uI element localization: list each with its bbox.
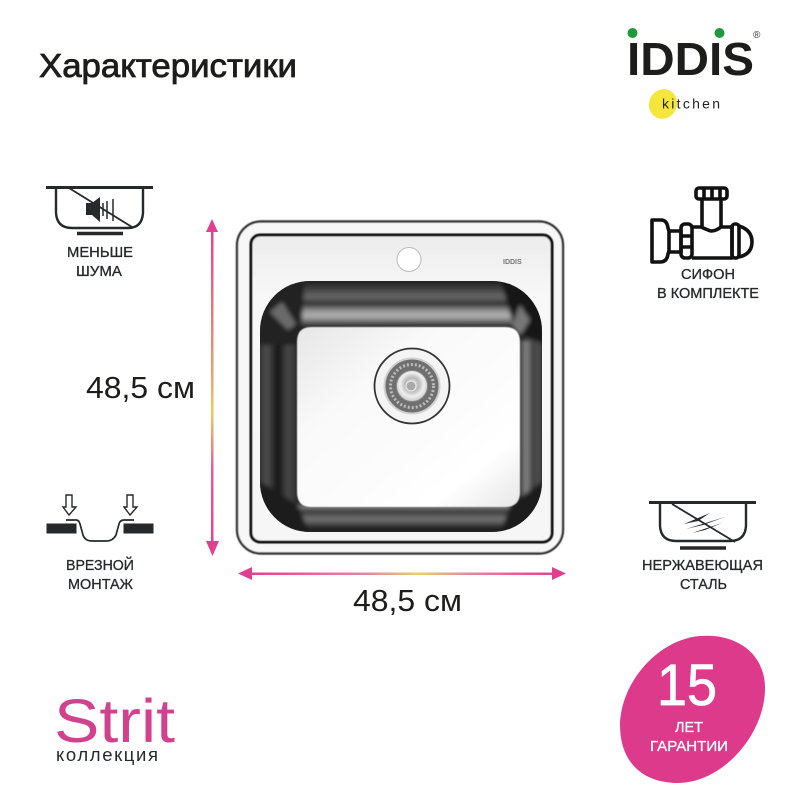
tap hole bbox=[397, 248, 421, 272]
width arrow bbox=[238, 567, 566, 580]
logo green dots bbox=[628, 28, 724, 38]
label: flush mount: ВРЕЗНОЙ bbox=[66, 556, 134, 574]
label: less noise bbox=[67, 245, 133, 280]
icon: less noise sink bbox=[46, 188, 153, 234]
label: siphon included bbox=[657, 267, 759, 302]
warranty badge bbox=[620, 636, 765, 783]
label: siphon included: СИФОН bbox=[681, 267, 735, 283]
icon: flush mount bbox=[47, 495, 153, 541]
drain bbox=[374, 348, 450, 424]
logo yellow blob bbox=[644, 84, 682, 124]
label: stainless steel: НЕРЖАВЕЮЩАЯ bbox=[642, 558, 763, 574]
logo registered mark: ® bbox=[753, 30, 761, 41]
logo wordmark: IDDIS bbox=[627, 33, 754, 85]
label: flush mount: МОНТАЖ bbox=[68, 577, 134, 593]
logo kitchen text: kitchen bbox=[662, 96, 720, 112]
icon: siphon bbox=[652, 188, 752, 262]
label: stainless steel: СТАЛЬ bbox=[680, 577, 727, 593]
brand mark on sink: IDDIS bbox=[503, 259, 522, 266]
logo: IDDIS kitchen bbox=[627, 28, 761, 124]
label: stainless steel bbox=[642, 558, 763, 593]
collection name: Strit bbox=[54, 687, 175, 755]
bowl bbox=[258, 279, 544, 534]
sink top plate bbox=[251, 235, 552, 542]
sink outer rim bbox=[237, 222, 563, 554]
sink image bbox=[237, 222, 563, 554]
warranty label: ГАРАНТИИ bbox=[650, 739, 728, 755]
icon: stainless steel sink bbox=[649, 502, 756, 548]
badge blob bbox=[620, 636, 765, 783]
collection label: коллекция bbox=[56, 744, 158, 765]
label: less noise: МЕНЬШЕ bbox=[67, 245, 133, 261]
label: siphon included: В КОМПЛЕКТЕ bbox=[657, 286, 759, 302]
warranty label bbox=[650, 720, 728, 755]
bowl floor bbox=[297, 327, 520, 507]
warranty label: ЛЕТ bbox=[675, 720, 703, 736]
title: Характеристики bbox=[39, 47, 297, 84]
width label: 48,5 см bbox=[353, 583, 462, 618]
label: flush mount bbox=[66, 556, 134, 593]
warranty number: 15 bbox=[657, 653, 717, 718]
height label: 48,5 см bbox=[86, 370, 195, 405]
label: less noise: ШУМА bbox=[76, 264, 122, 280]
height arrow bbox=[206, 219, 219, 556]
